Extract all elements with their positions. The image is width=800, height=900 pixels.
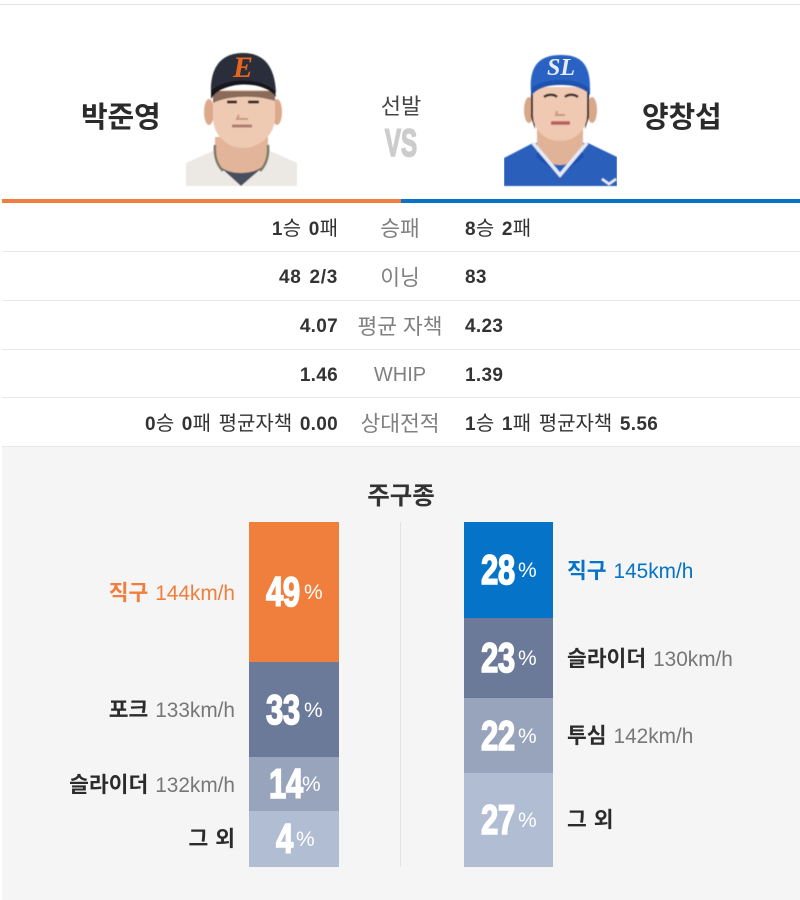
top rule	[0, 4, 800, 5]
bar segment: slider 14%	[249, 757, 339, 811]
row: WHIP: 1.46	[300, 365, 338, 386]
bar segment: fork 33%: %	[304, 698, 323, 722]
bar segment: fork 33%	[249, 662, 339, 757]
label: other: 그 외	[567, 808, 614, 832]
row: innings: 48 2/3	[279, 267, 338, 288]
label: other: 그 외	[188, 827, 235, 851]
bar segment: two-seam 22%	[464, 698, 553, 773]
row: head to head: 1승 1패 평균자책 5.56	[465, 413, 658, 435]
row: ERA	[2, 301, 800, 350]
bar segment: fastball 49%	[249, 522, 339, 662]
bar segment: slider 23%: 23	[481, 634, 515, 681]
VS block	[381, 94, 421, 165]
bar segment: slider 23%: %	[518, 647, 537, 670]
bar segment: other 4%: 4	[276, 815, 293, 862]
row: head to head	[2, 398, 800, 447]
label: fork: 포크 133km/h	[109, 698, 235, 722]
bar segment: fastball 49%: 49	[266, 568, 300, 615]
panel: pitch mix	[2, 447, 800, 900]
row: record: 1승 0패	[272, 218, 338, 240]
row: innings: 이닝	[380, 266, 420, 290]
bar segment: other 27%: %	[518, 809, 537, 832]
row: ERA: 4.23	[465, 316, 503, 337]
bar segment: two-seam 22%: %	[518, 724, 537, 748]
right pitcher name: 양창섭	[642, 102, 721, 134]
icon: left pitcher portrait	[186, 51, 298, 186]
row: head to head: 상대전적	[360, 412, 440, 436]
icon: left pitcher portrait: E	[232, 51, 253, 84]
bar segment: other 4%: %	[296, 828, 315, 851]
row: WHIP	[2, 350, 800, 398]
label: slider: 슬라이더 130km/h	[567, 647, 733, 671]
row: innings	[2, 252, 800, 301]
bar segment: other 27%	[464, 773, 553, 867]
bar segment: fastball 28%	[464, 522, 553, 618]
label: fastball: 직구 144km/h	[109, 581, 235, 605]
icon: right pitcher portrait: SL	[547, 55, 575, 81]
row: record: 8승 2패	[465, 218, 531, 240]
bar segment: two-seam 22%: 22	[481, 712, 515, 758]
bar segment: other 27%: 27	[481, 796, 515, 843]
bar segment: slider 23%	[464, 618, 553, 698]
icon: right pitcher portrait	[504, 54, 617, 187]
chart: left pitcher pitch mix	[69, 522, 339, 867]
heading: 주구종	[367, 483, 435, 510]
bar segment: slider 14%: 14	[269, 760, 303, 807]
bar segment: other 4%	[249, 811, 339, 867]
starter label: 선발	[381, 94, 421, 119]
row: WHIP: 1.39	[465, 365, 503, 386]
VS mark: VS	[385, 122, 417, 165]
header: pitchers matchup	[81, 51, 721, 187]
bar segment: fastball 49%: %	[304, 581, 323, 604]
centre divider	[400, 522, 401, 867]
row: ERA: 4.07	[300, 316, 338, 337]
row: ERA: 평균 자책	[357, 315, 443, 339]
label: two-seam: 투심 142km/h	[567, 724, 693, 748]
stats table	[2, 217, 800, 447]
team colour bar	[2, 199, 800, 203]
label: slider: 슬라이더 132km/h	[69, 773, 235, 797]
bar segment: fastball 28%: %	[518, 559, 537, 582]
bar segment: fork 33%: 33	[266, 686, 300, 732]
bar segment: slider 14%: %	[302, 773, 321, 796]
chart: right pitcher pitch mix	[464, 522, 733, 867]
row: WHIP: WHIP	[374, 364, 426, 386]
label: fastball: 직구 145km/h	[567, 559, 693, 583]
left pitcher name: 박준영	[81, 102, 160, 134]
row: record	[2, 203, 800, 252]
row: innings: 83	[465, 267, 487, 288]
bar segment: fastball 28%: 28	[481, 546, 515, 593]
row: record: 승패	[380, 217, 420, 241]
row: head to head: 0승 0패 평균자책 0.00	[145, 413, 338, 435]
